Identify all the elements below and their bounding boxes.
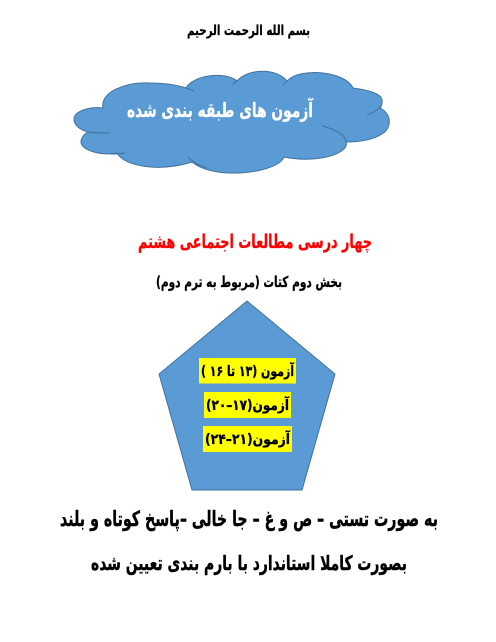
pentagon [159,301,335,490]
heading: basmala: بسم الله الرحمت الرحیم [187,23,310,39]
exam label 17 to 20 [204,392,291,418]
cloud inner contours [88,81,381,168]
heading: red subject line: چهار درسی مطالعات اجتماعی هشتم [138,231,372,253]
panel: pentagon with exam ranges [159,301,335,490]
exam label 21 to 24: آزمون(۲۱–۲۴) [205,430,291,448]
exam label 13 to 16 [199,358,296,384]
title: آزمون های طبقه بندی شده [127,97,314,122]
exam label 21 to 24 [203,426,292,452]
exam label 13 to 16: آزمون (۱۳ تا ۱۶ ) [201,362,295,380]
subheading: book section: بخش دوم کتات (مربوط به ترم دوم) [156,273,342,291]
cloud shape [74,71,389,173]
exam label 17 to 20: آزمون(۱۷–۲۰) [206,396,290,414]
panel: cloud with title [74,71,389,173]
